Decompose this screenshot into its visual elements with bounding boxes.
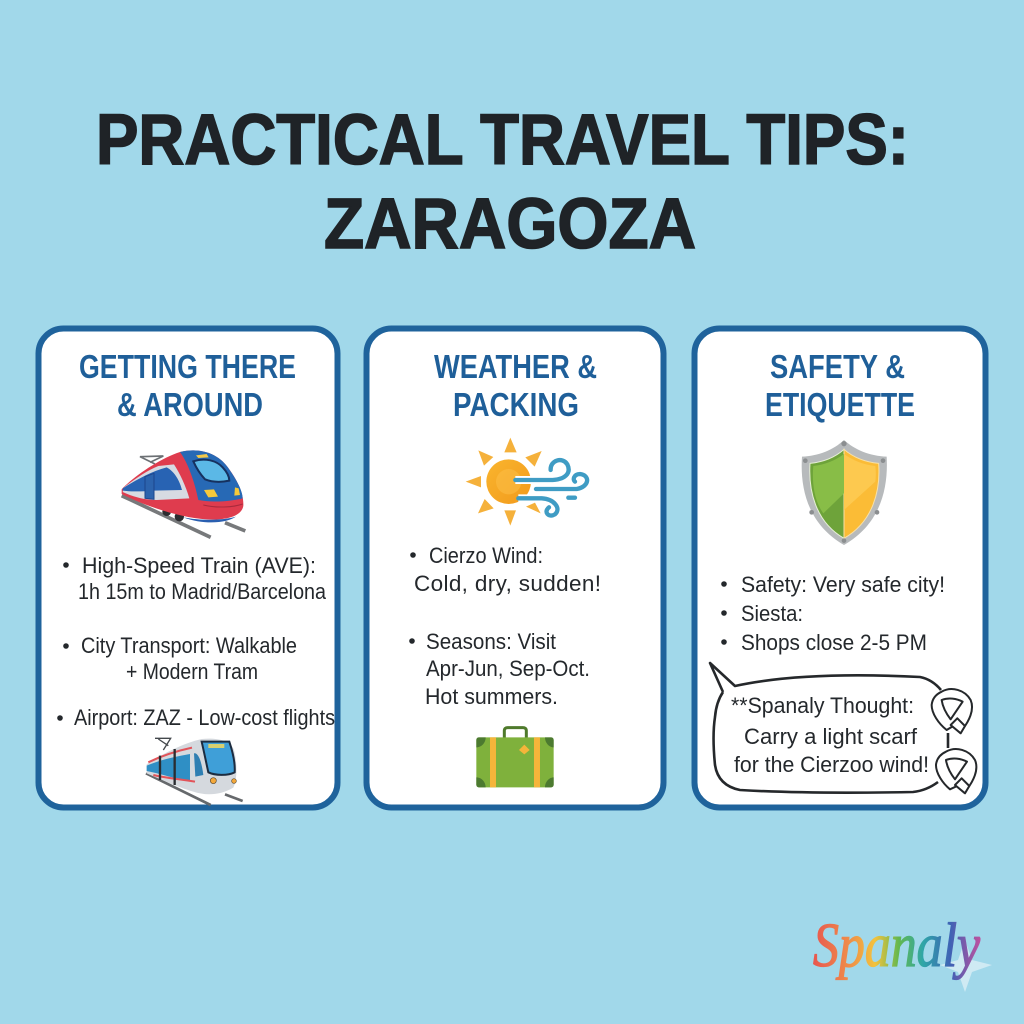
icon: high-speed train — [122, 450, 245, 537]
icon: tram — [146, 738, 243, 805]
bullet list: transport: City Transport: Walkable — [81, 633, 297, 658]
bullet list: weather: Cold, dry, sudden! — [414, 571, 601, 596]
title — [96, 101, 909, 264]
heading: weather and packing: PACKING — [453, 386, 579, 423]
callout: Spanaly Thought: **Spanaly Thought: — [731, 693, 914, 718]
bullet list: weather: Cierzo Wind: — [429, 543, 543, 568]
panel: safety and etiquette — [694, 328, 986, 808]
heading: weather and packing — [434, 348, 597, 423]
heading: weather and packing: WEATHER & — [434, 348, 597, 385]
callout: Spanaly Thought: for the Cierzoo wind! — [734, 752, 929, 777]
icon: shield — [802, 440, 887, 545]
bullet list: weather — [409, 543, 601, 709]
bullet list: transport: 1h 15m to Madrid/Barcelona — [78, 579, 326, 604]
icon: suitcase — [476, 728, 554, 787]
bullet list: transport: Airport: ZAZ - Low-cost flights — [74, 705, 335, 730]
icon: scarf top — [932, 689, 972, 733]
logo: Spanaly: Spanaly — [813, 912, 980, 980]
heading: safety and etiquette — [765, 348, 915, 423]
bullet list: weather: Apr-Jun, Sep-Oct. — [426, 656, 590, 681]
bullet list: safety — [721, 572, 945, 655]
icon: sun and wind — [466, 438, 587, 526]
icon: scarf bottom — [936, 749, 976, 793]
bullet list: transport — [57, 553, 335, 730]
callout: Spanaly Thought: Carry a light scarf — [744, 724, 918, 749]
panel: getting there and around — [38, 328, 338, 808]
bullet list: safety: Shops close 2-5 PM — [741, 630, 927, 655]
bullet list: safety: Safety: Very safe city! — [741, 572, 945, 597]
panel: weather and packing — [366, 328, 664, 808]
heading: getting there and around: GETTING THERE — [79, 348, 296, 385]
heading: getting there and around — [79, 348, 296, 423]
heading: getting there and around: & AROUND — [117, 386, 263, 423]
title: ZARAGOZA — [324, 185, 696, 264]
bullet list: weather: Seasons: Visit — [426, 629, 557, 654]
bullet list: safety: Siesta: — [741, 601, 803, 626]
bullet list: transport: + Modern Tram — [126, 659, 258, 684]
heading: safety and etiquette: ETIQUETTE — [765, 386, 915, 423]
callout: Spanaly Thought — [710, 663, 976, 793]
bullet list: transport: High-Speed Train (AVE): — [82, 553, 316, 578]
bullet list: weather: Hot summers. — [425, 684, 558, 709]
title: PRACTICAL TRAVEL TIPS: — [96, 101, 909, 180]
heading: safety and etiquette: SAFETY & — [770, 348, 905, 385]
